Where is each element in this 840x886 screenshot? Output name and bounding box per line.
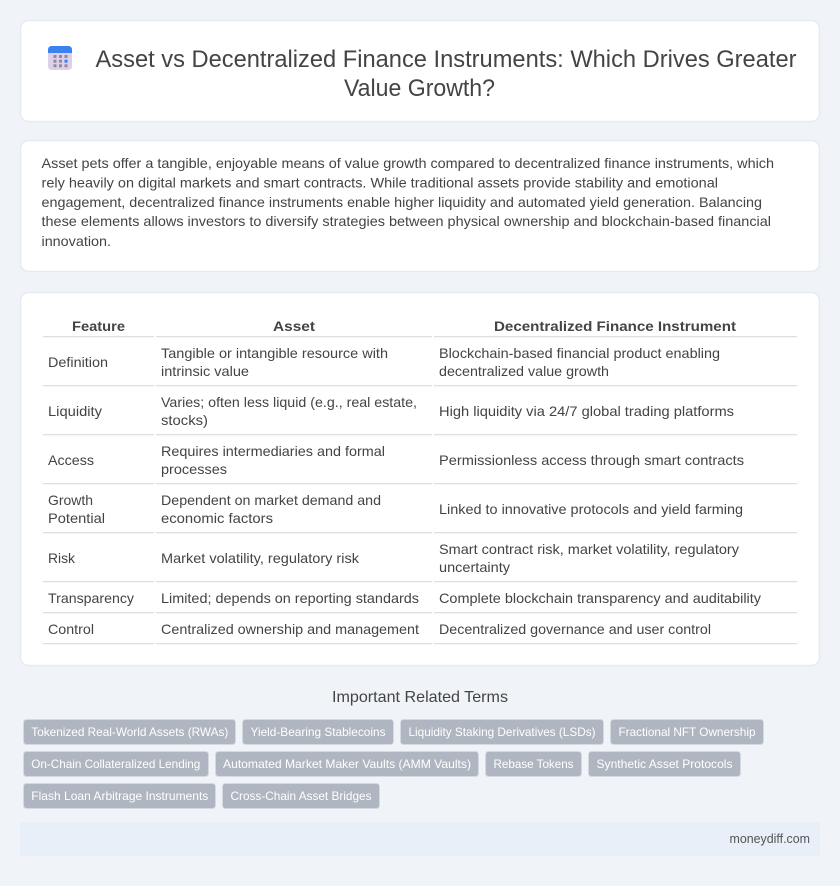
- row: access: [48, 443, 744, 477]
- tags: related terms: On-Chain Collateralized Lending: [31, 757, 200, 771]
- table header row: Feature: [72, 318, 125, 334]
- row: liquidity: Varies; often less liquid (e.g., real estate,: [161, 394, 417, 410]
- row: growth potential: Linked to innovative protocols and yield farming: [439, 501, 743, 517]
- row: growth potential: economic factors: [161, 510, 273, 526]
- text block: summary paragraph: [42, 155, 774, 249]
- icon: calendar: [48, 46, 72, 70]
- row: definition: [48, 345, 720, 379]
- text block: summary paragraph: engagement, decentralized finance instruments enable higher liquidity and automated yield generation. Balancing: [42, 194, 762, 210]
- title: Asset vs Decentralized Finance Instruments: Which Drives Greater: [96, 46, 797, 73]
- row: risk: Market volatility, regulatory risk: [161, 550, 360, 566]
- text block: summary paragraph: rely heavily on digital markets and smart contracts. While traditional assets provide stability and emotional: [42, 174, 718, 190]
- table header row: Decentralized Finance Instrument: [494, 318, 736, 334]
- text block: summary paragraph: these elements allows investors to diversify strategies between physical ownership and blockchain-based financial: [42, 213, 771, 229]
- row: growth potential: Dependent on market demand and: [161, 492, 381, 508]
- tags: related terms: Rebase Tokens: [494, 757, 574, 771]
- tags: related terms: Automated Market Maker Vaults (AMM Vaults): [223, 757, 471, 771]
- title: Value Growth?: [344, 75, 495, 102]
- row: control: Decentralized governance and user control: [439, 621, 711, 637]
- tags: related terms: Tokenized Real-World Assets (RWAs): [31, 725, 228, 739]
- row: liquidity: High liquidity via 24/7 global trading platforms: [439, 403, 734, 419]
- footer: moneydiff.com: [730, 831, 810, 846]
- row: liquidity: Liquidity: [48, 403, 102, 419]
- row: definition: decentralized value growth: [439, 363, 609, 379]
- row: liquidity: [48, 394, 734, 428]
- row: growth potential: Growth: [48, 492, 93, 508]
- row: risk: [48, 541, 739, 575]
- row: definition: Definition: [48, 354, 108, 370]
- footer: [20, 822, 820, 856]
- row: definition: Tangible or intangible resource with: [161, 345, 388, 361]
- tags: related terms: Liquidity Staking Derivatives (LSDs): [408, 725, 596, 739]
- row: control: Control: [48, 621, 94, 637]
- panel: comparison table: [20, 292, 820, 666]
- tags: related terms: Fractional NFT Ownership: [618, 725, 756, 739]
- row: control: Centralized ownership and management: [161, 621, 419, 637]
- tags: related terms: Flash Loan Arbitrage Instruments: [31, 789, 208, 803]
- row: growth potential: Potential: [48, 510, 105, 526]
- row: access: Requires intermediaries and formal: [161, 443, 385, 459]
- row: transparency: Complete blockchain transparency and auditability: [439, 590, 761, 606]
- text block: summary paragraph: innovation.: [42, 233, 111, 249]
- tags: related terms: Synthetic Asset Protocols: [596, 757, 732, 771]
- row: transparency: [48, 590, 761, 606]
- heading: important related terms: Important Related Terms: [332, 689, 508, 706]
- panel: header: [20, 20, 820, 122]
- row: definition: Blockchain-based financial product enabling: [439, 345, 720, 361]
- tags: related terms: [24, 720, 764, 808]
- row: growth potential: [48, 492, 743, 526]
- row: transparency: Transparency: [48, 590, 134, 606]
- row: risk: uncertainty: [439, 559, 510, 575]
- row: risk: Risk: [48, 550, 76, 566]
- row: control: [48, 621, 711, 637]
- row: access: Access: [48, 452, 94, 468]
- panel: summary text: [20, 140, 820, 272]
- title: [96, 46, 797, 102]
- row: definition: intrinsic value: [161, 363, 249, 379]
- tags: related terms: Yield-Bearing Stablecoins: [250, 725, 386, 739]
- row: transparency: Limited; depends on reporting standards: [161, 590, 419, 606]
- row: access: processes: [161, 461, 227, 477]
- table header row: Asset: [273, 318, 315, 334]
- table header row: [72, 318, 736, 334]
- row: risk: Smart contract risk, market volatility, regulatory: [439, 541, 739, 557]
- text block: summary paragraph: Asset pets offer a tangible, enjoyable means of value growth compared to decentralized finance instruments, which: [42, 155, 774, 171]
- tags: related terms: Cross-Chain Asset Bridges: [230, 789, 372, 803]
- row: liquidity: stocks): [161, 412, 208, 428]
- row: access: Permissionless access through smart contracts: [439, 452, 744, 468]
